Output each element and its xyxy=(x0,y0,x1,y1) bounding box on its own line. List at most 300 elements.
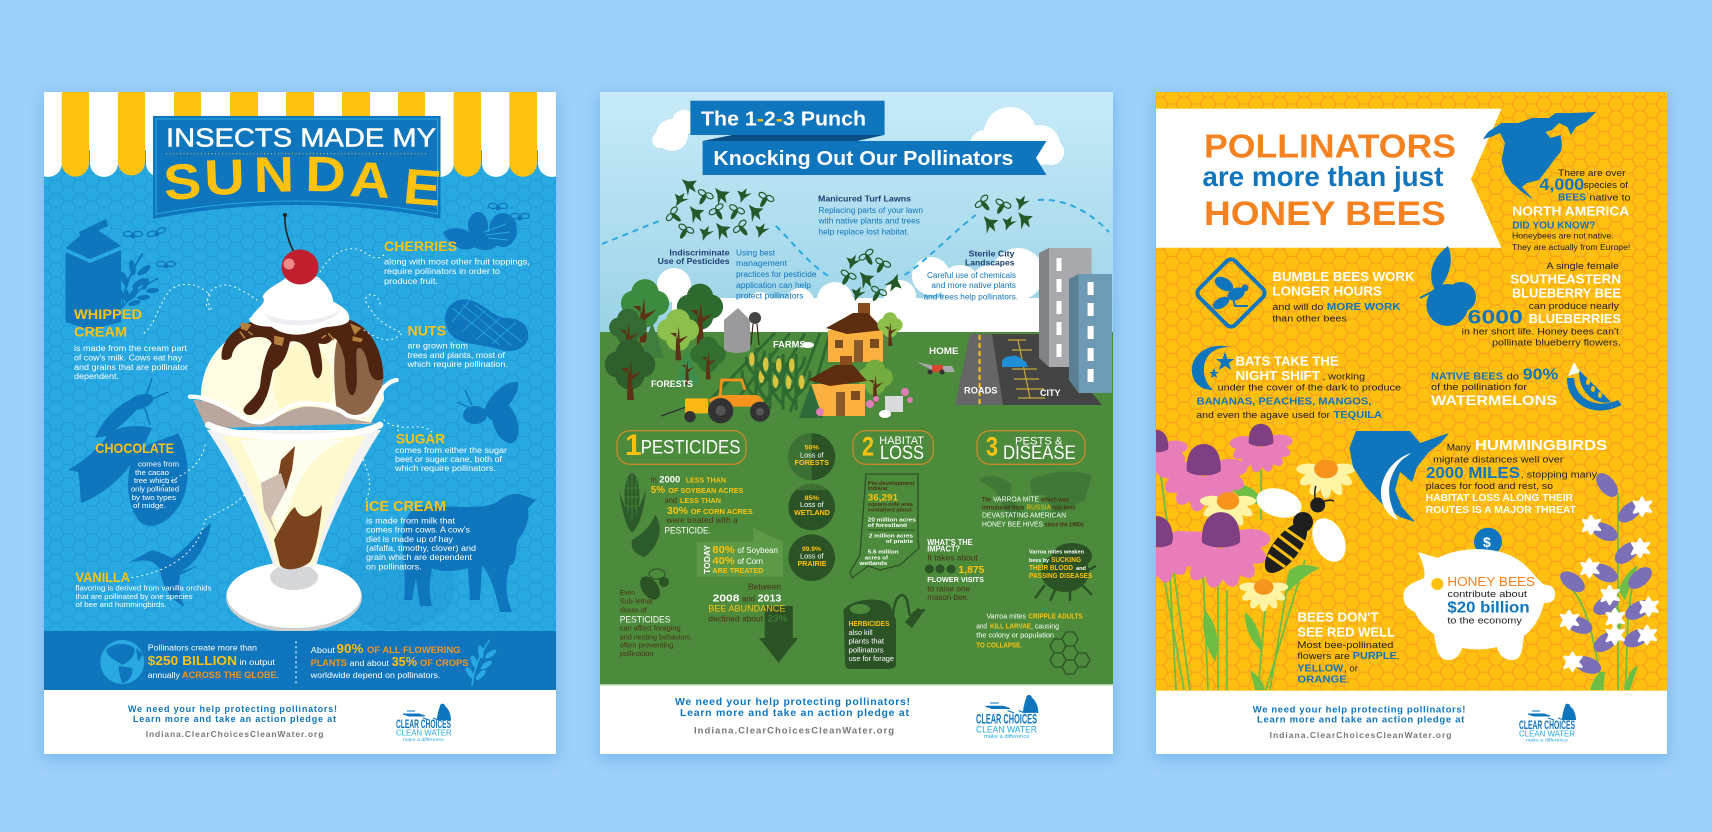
text: chocolate: comes from xyxy=(138,460,179,469)
text: the impact: to raise one xyxy=(927,585,971,594)
icon: piggy bank: contribute about xyxy=(1447,589,1528,599)
text: 90 percent: 35% xyxy=(392,654,417,669)
text: the impact: 1,875 xyxy=(958,564,985,576)
text: ice cream: comes from cows. A cow's xyxy=(366,526,470,535)
text: 90 percent: and about xyxy=(350,659,390,668)
loss circles: PRAIRIE xyxy=(798,559,826,568)
text: 90 percent: worldwide depend on pollinators. xyxy=(310,671,440,680)
text: soybean and corn stats xyxy=(651,475,753,537)
icon: moon and stars xyxy=(1192,346,1234,390)
text: cherries xyxy=(384,239,530,286)
footer: Learn more and take an action pledge at xyxy=(133,714,336,724)
icon: north america xyxy=(1483,112,1596,200)
icon: peanut xyxy=(445,299,528,351)
text: 4000 species xyxy=(1512,168,1631,252)
text: cripple adults: TO COLLAPSE. xyxy=(976,642,1022,649)
scene labels xyxy=(651,340,1061,398)
text: sugar: comes from either the sugar xyxy=(395,446,507,455)
text: whipped cream: dependent. xyxy=(74,372,119,381)
indiana map with habitat stats: acres of xyxy=(865,555,888,561)
text: chocolate xyxy=(95,441,179,510)
sundae xyxy=(190,320,397,632)
icon: cherry xyxy=(282,213,318,284)
text: hummingbirds: 2000 MILES xyxy=(1426,465,1520,482)
text: watermelons: 90% xyxy=(1523,366,1558,383)
text: sub-lethal doses: Even xyxy=(620,588,635,597)
text: soybean and corn stats: 2000 xyxy=(659,475,680,485)
text: soybean and corn stats: PESTICIDE. xyxy=(664,526,711,537)
text: blueberry bee xyxy=(1462,261,1621,348)
text: sterile city: Sterile City xyxy=(969,249,1015,258)
text: vanilla: VANILLA xyxy=(76,570,130,585)
text: vanilla: of bee and hummingbirds. xyxy=(76,600,166,609)
indiana map with habitat stats: 2 million acres xyxy=(869,533,913,539)
text: ice cream: on pollinators. xyxy=(366,563,422,572)
text: watermelons xyxy=(1431,366,1558,408)
text: bees don't see red: . xyxy=(1347,675,1350,685)
text: sucking blood xyxy=(1029,549,1093,580)
indiana map with habitat stats: of prairie xyxy=(886,539,913,545)
text: 90 percent xyxy=(310,641,468,680)
title banners: Knocking Out Our Pollinators xyxy=(713,148,1013,170)
text: nuts: NUTS xyxy=(408,324,446,339)
text: soybean and corn stats: LESS THAN xyxy=(686,476,726,485)
text: ice cream xyxy=(365,499,476,572)
title plate: INSECTS MADE MY xyxy=(166,125,436,153)
text: bats: NIGHT SHIFT xyxy=(1236,368,1320,383)
text: bee abundance: and xyxy=(742,594,755,603)
text: sub-lethal doses: doses of xyxy=(620,605,648,614)
text: sucking blood: THEIR BLOOD xyxy=(1029,565,1073,572)
logo: make a difference xyxy=(984,734,1030,740)
text: vanilla: that are pollinated by one species xyxy=(76,592,193,601)
text: 250 billion: in output xyxy=(239,658,276,667)
text: hummingbirds: HABITAT LOSS ALONG THEIR xyxy=(1426,492,1573,504)
scene labels: HOME xyxy=(929,346,959,356)
text: the impact: IMPACT? xyxy=(927,544,960,553)
text: varroa mite: has been xyxy=(1053,506,1076,512)
stat band xyxy=(44,631,556,690)
text: bees don't see red: YELLOW xyxy=(1297,663,1343,675)
icon: silo and windmill xyxy=(724,308,761,353)
text: bee abundance: declined about xyxy=(708,614,764,623)
text: watermelons: do xyxy=(1507,371,1519,381)
text: bats: and even the agave used for xyxy=(1196,410,1330,420)
text: bees don't see red: SEE RED WELL xyxy=(1297,624,1395,639)
text: sterile city xyxy=(924,249,1018,302)
text: sucking blood: bees by xyxy=(1029,558,1050,564)
text: soybean and corn stats: OF CORN ACRES xyxy=(691,507,753,516)
text: varroa mite: RUSSIA xyxy=(1026,503,1051,512)
text: 250 billion xyxy=(148,644,279,680)
text: whipped cream xyxy=(74,307,188,381)
text: blueberry bee: BLUEBERRIES xyxy=(1529,311,1621,326)
text: sub-lethal doses: pollination xyxy=(620,649,654,658)
text: sub-lethal doses: PESTICIDES xyxy=(620,615,670,626)
text: 4000 species: DID YOU KNOW? xyxy=(1512,220,1596,231)
panel: insects made my sundae xyxy=(34,92,566,754)
icon: varroa mite xyxy=(1035,543,1096,601)
text: 4000 species: They are actually from Europe! xyxy=(1512,242,1630,252)
text: hummingbirds xyxy=(1426,437,1607,516)
text: whipped cream: and grains that are pollinator xyxy=(74,363,188,372)
text: chocolate: by two types xyxy=(132,493,176,502)
text: cherries: along with most other fruit toppings, xyxy=(384,257,530,266)
text: whipped cream: of cow's milk. Cows eat hay xyxy=(74,354,182,363)
text: pesticides: application can help xyxy=(736,281,812,290)
indiana map with habitat stats: 20 million acres xyxy=(868,517,916,523)
icon: small bees by carton xyxy=(124,226,176,268)
scene labels: ROADS xyxy=(964,386,998,396)
text: 250 billion: $250 BILLION xyxy=(148,653,237,668)
text: sterile city: Landscapes xyxy=(965,258,1015,267)
heading: 2 habitat loss: HABITAT xyxy=(879,435,924,447)
text: chocolate: only pollinated xyxy=(131,485,179,494)
heading: 3 pests and disease: DISEASE xyxy=(1003,443,1076,464)
text: sub-lethal doses xyxy=(620,588,692,658)
text: varroa mite: which was xyxy=(1040,498,1070,504)
icon: piggy bank: to the economy xyxy=(1447,615,1522,625)
icon: bee xyxy=(1253,484,1352,580)
icon: honeycomb outline xyxy=(1050,632,1090,674)
loss circles: Loss of xyxy=(800,451,824,460)
text: 4000 species: 4,000 xyxy=(1539,175,1584,194)
logo: CLEAR CHOICES xyxy=(976,711,1037,726)
footer xyxy=(1156,691,1667,754)
text: the impact: WHAT'S THE xyxy=(927,538,973,547)
icon: down arrow xyxy=(759,606,798,663)
text: cripple adults: the colony or population xyxy=(976,631,1054,640)
text: ice cream: ICE CREAM xyxy=(365,499,446,515)
title banner: are more than just xyxy=(1202,161,1443,192)
text: 90 percent: OF ALL FLOWERING xyxy=(367,645,460,655)
herbicide jug: HERBICIDES xyxy=(849,619,890,628)
heading: 1 pesticides xyxy=(617,429,746,464)
title plate xyxy=(153,116,444,219)
loss circles: 99.9% xyxy=(802,546,821,553)
text: vanilla xyxy=(76,570,212,609)
scene: fields xyxy=(705,333,830,412)
indiana map with habitat stats: of forestland xyxy=(868,523,907,529)
text: blueberry bee: BLUEBERRY BEE xyxy=(1512,285,1621,300)
text: blueberry bee: A single female xyxy=(1546,261,1619,271)
title plate: SUNDAE xyxy=(162,147,444,217)
icon: wheat xyxy=(121,253,159,308)
text: nuts xyxy=(406,324,508,369)
text: cripple adults: KILL LARVAE xyxy=(990,623,1031,630)
text: bats xyxy=(1196,354,1401,421)
text: sub-lethal doses: can affect foraging xyxy=(620,624,681,633)
text: watermelons: of the pollination for xyxy=(1431,382,1527,392)
text: bumble bees: BUMBLE BEES WORK xyxy=(1272,269,1415,284)
footer: Indiana.ClearChoicesCleanWater.org xyxy=(694,725,894,736)
text: the impact xyxy=(925,538,985,602)
heading: 3 pests and disease: 3 xyxy=(986,432,998,462)
icon: small tree xyxy=(877,312,903,346)
icon: piggy bank: $20 billion xyxy=(1447,599,1530,616)
icon: bumble bee sign xyxy=(1195,257,1267,329)
loss circles: FORESTS xyxy=(794,458,829,467)
loss circles: 50% xyxy=(804,445,819,452)
icon: bee silhouette xyxy=(456,382,518,443)
logo: make a difference xyxy=(403,737,445,742)
flowers xyxy=(1111,424,1356,690)
text: whipped cream: WHIPPED xyxy=(74,307,142,322)
text: bumble bees: than other bees xyxy=(1272,314,1347,324)
text: sucking blood: SUCKING xyxy=(1051,557,1082,564)
herbicide jug: pollinators xyxy=(849,645,884,654)
text: turf lawns: help replace lost habitat. xyxy=(818,228,909,237)
text: varroa mite xyxy=(982,495,1085,529)
dashed flight path xyxy=(602,200,1109,277)
text: bumble bees: LONGER HOURS xyxy=(1272,283,1382,298)
icon: house one xyxy=(826,303,884,362)
logo: CLEAN WATER xyxy=(396,729,452,738)
icon: buildings xyxy=(1039,248,1112,393)
text: varroa mite: VARROA MITE xyxy=(993,495,1039,504)
icon: midge xyxy=(95,378,168,438)
text: bumble bees: and will do xyxy=(1272,302,1323,312)
herbicide jug xyxy=(844,595,925,669)
text: watermelons: WATERMELONS xyxy=(1431,392,1557,408)
text: pesticides: Using best xyxy=(736,249,776,258)
text: blueberry bee: SOUTHEASTERN xyxy=(1510,271,1621,286)
text: pesticides: management xyxy=(736,259,788,268)
text: turf lawns: with native plants and trees xyxy=(817,217,920,226)
icon: insect swarms xyxy=(664,172,1037,305)
text: the impact: FLOWER VISITS xyxy=(927,575,984,584)
text: bats: BATS TAKE THE xyxy=(1236,354,1339,369)
footer: We need your help protecting pollinators! xyxy=(675,696,910,708)
loss circles: 85% xyxy=(804,495,819,502)
indiana map with habitat stats: square-mile area xyxy=(868,502,913,508)
heading: 1 pesticides: PESTICIDES xyxy=(641,437,740,458)
text: bumble bees: MORE WORK xyxy=(1327,301,1401,313)
loss circles: Loss of xyxy=(800,500,824,509)
text: bees don't see red: , xyxy=(1397,651,1399,661)
today arrow callout: of Soybean xyxy=(737,546,778,555)
text: the impact: mason bee. xyxy=(927,593,969,602)
text: 90 percent: PLANTS xyxy=(311,658,347,668)
text: chocolate: the cacao xyxy=(135,468,169,477)
awning xyxy=(34,92,566,177)
text: cripple adults: CRIPPLE ADULTS xyxy=(1028,613,1083,620)
herbicide jug: use for forage xyxy=(849,654,894,663)
text: bees don't see red: PURPLE xyxy=(1353,650,1397,662)
indiana map with habitat stats xyxy=(850,474,919,578)
text: bees don't see red: flowers are xyxy=(1297,651,1350,661)
forest xyxy=(605,279,726,400)
icon: wheat xyxy=(464,640,498,686)
icon: piggy bank: HONEY BEES xyxy=(1447,575,1535,589)
icon: globe xyxy=(100,640,144,684)
text: 90 percent: OF CROPS xyxy=(420,658,468,668)
text: 4000 species: There are over xyxy=(1558,168,1626,178)
text: hummingbirds: ROUTES IS A MAJOR THREAT xyxy=(1426,504,1577,516)
footer xyxy=(128,704,452,741)
text: whipped cream: is made from the cream part xyxy=(74,344,188,353)
icon: cherry blossom xyxy=(443,203,530,250)
indiana map with habitat stats: wetlands xyxy=(858,561,887,567)
text: bees don't see red: ORANGE xyxy=(1297,674,1347,686)
text: ice cream: is made from milk that xyxy=(366,517,456,526)
icon: piggy bank: $ xyxy=(1483,534,1491,550)
clouds xyxy=(652,107,1072,332)
title banner xyxy=(1156,109,1502,248)
text: bees don't see red: BEES DON'T xyxy=(1297,610,1379,625)
heading: 2 habitat loss: LOSS xyxy=(880,443,924,464)
text: whipped cream: CREAM xyxy=(74,325,127,340)
footer: We need your help protecting pollinators! xyxy=(1253,705,1465,716)
text: soybean and corn stats: 5% xyxy=(651,484,666,496)
text: watermelons: NATIVE BEES xyxy=(1431,370,1503,382)
herbicide jug: also kill xyxy=(849,628,873,637)
heading: 3 pests and disease: PESTS & xyxy=(1015,435,1063,447)
text: blueberry bee: can produce nearly xyxy=(1529,301,1620,311)
text: varroa mite: The xyxy=(982,498,992,504)
text: varroa mite: HONEY BEE HIVES xyxy=(982,520,1043,529)
icon: piggy bank xyxy=(1403,528,1555,660)
text: pesticides: Indiscriminate xyxy=(669,249,730,258)
icon: house two xyxy=(799,356,893,418)
indiana map with habitat stats: 5.6 million xyxy=(868,550,899,556)
text: varroa mite: since the 1980s xyxy=(1045,523,1085,529)
icon: tractor xyxy=(661,380,770,423)
text: bats: TEQUILA xyxy=(1334,409,1382,421)
text: bees don't see red: Most bee-pollinated xyxy=(1297,640,1393,650)
text: chocolate: tree which is xyxy=(134,476,177,485)
text: chocolate: of midge. xyxy=(133,501,166,510)
icon: bee xyxy=(636,569,669,603)
text: sucking blood: and xyxy=(1076,566,1086,572)
icon: whipped cream xyxy=(249,277,349,335)
dotted flight paths xyxy=(130,249,432,578)
heading: 2 habitat loss: 2 xyxy=(862,432,874,462)
text: bee abundance: 2008 xyxy=(713,592,740,604)
text: bee abundance: BEE ABUNDANCE xyxy=(708,604,785,614)
today arrow callout: TODAY xyxy=(703,544,712,574)
scene labels: FORESTS xyxy=(651,379,693,389)
text: varroa mite: introduced from xyxy=(982,506,1024,512)
text: 4000 species: Honeybees are not native. xyxy=(1512,231,1614,241)
panel: pollinators are more than just honey bees xyxy=(1111,92,1667,754)
icon: watermelon slice xyxy=(1567,362,1622,410)
text: bats: BANANAS, PEACHES, MANGOS, xyxy=(1197,396,1371,408)
text: blueberry bee: pollinate blueberry flowers. xyxy=(1492,338,1621,348)
text: varroa mite: DEVASTATING AMERICAN xyxy=(982,511,1066,520)
indiana map with habitat stats: Pre-development xyxy=(868,481,915,487)
today arrow callout: 80% xyxy=(712,545,735,556)
text: turf lawns: Manicured Turf Lawns xyxy=(818,195,912,204)
text: sterile city: Careful use of chemicals xyxy=(927,271,1016,280)
text: pesticides: protect pollinators xyxy=(736,292,804,301)
text: cherries: produce fruit. xyxy=(384,277,438,286)
text: 4000 species: species of xyxy=(1584,180,1629,190)
text: bee abundance xyxy=(708,582,787,623)
heading: 1 pesticides: 1 xyxy=(625,429,642,462)
text: sub-lethal doses: often preventing xyxy=(620,640,674,649)
indiana map with habitat stats: 36,291 xyxy=(868,492,899,503)
logo xyxy=(396,704,452,742)
today arrow callout: of Corn xyxy=(737,557,763,566)
indiana map with habitat stats: contained about xyxy=(868,508,912,514)
text: cherries: CHERRIES xyxy=(384,239,457,254)
text: ice cream: diet is made up of hay xyxy=(366,535,453,544)
text: cripple adults xyxy=(976,611,1083,649)
text: sterile city: and trees help pollinators. xyxy=(924,293,1018,302)
text: bee abundance: 23% xyxy=(768,613,787,623)
loss circles: WETLAND xyxy=(794,508,831,517)
logo: CLEAN WATER xyxy=(1519,730,1575,739)
text: nuts: which require pollination. xyxy=(406,360,508,369)
text: sucking blood: PASSING DISEASES xyxy=(1029,573,1093,580)
text: nuts: trees and plants, most of xyxy=(408,351,506,360)
text: 250 billion: ACROSS THE GLOBE xyxy=(182,670,277,680)
title banners xyxy=(690,101,1046,175)
footer: We need your help protecting pollinators! xyxy=(128,704,337,714)
icon: corn rows xyxy=(742,348,810,410)
shadow under sundae xyxy=(342,542,453,628)
icon: garden flowers and hive xyxy=(802,342,913,418)
text: sterile city: and more native plants xyxy=(931,281,1016,290)
text: 250 billion: . xyxy=(277,671,279,680)
text: bee abundance: 2013 xyxy=(758,592,781,604)
text: turf lawns xyxy=(817,195,923,237)
text: ice cream: grain which are dependent xyxy=(366,553,473,562)
scene labels: CITY xyxy=(1040,388,1061,398)
icon: car xyxy=(1002,356,1028,367)
icon: map with migration arrow xyxy=(1349,431,1449,522)
text: 90 percent: 90% xyxy=(336,641,364,656)
text: pesticides xyxy=(658,249,817,301)
panel: the 1-2-3 punch xyxy=(600,92,1113,754)
logo: CLEAR CHOICES xyxy=(1519,718,1575,732)
icon: cacao leaf and pod xyxy=(68,426,188,526)
text: soybean and corn stats: were treated with a xyxy=(665,516,738,525)
text: cripple adults: , causing xyxy=(1031,621,1059,630)
heading: 3 pests and disease xyxy=(977,431,1085,464)
text: sub-lethal doses: Sub-lethal xyxy=(620,597,653,606)
loss circles xyxy=(788,433,835,581)
today arrow callout xyxy=(696,528,783,577)
text: sucking blood: Varroa mites weaken xyxy=(1029,549,1085,555)
icon: world map xyxy=(979,472,1092,525)
text: cripple adults: Varroa mites xyxy=(986,611,1026,620)
icon: lawn mower xyxy=(917,362,955,374)
text: soybean and corn stats: and xyxy=(665,496,677,505)
footer xyxy=(600,684,1113,754)
logo: make a difference xyxy=(1526,738,1569,743)
text: vanilla: flavoring is derived from vanilla orchids xyxy=(76,584,212,593)
text: hummingbirds: HUMMINGBIRDS xyxy=(1475,437,1607,454)
text: the impact: It takes about xyxy=(927,554,979,563)
today arrow callout: 40% xyxy=(712,556,735,567)
text: cherries: require pollinators in order to xyxy=(384,267,501,276)
logo: CLEAR CHOICES xyxy=(396,717,451,731)
logo xyxy=(1519,704,1576,743)
text: hummingbirds: , stopping many xyxy=(1521,470,1598,480)
footer: Learn more and take an action pledge at xyxy=(680,707,910,719)
scene labels: FARMS xyxy=(773,340,806,350)
herbicide jug: plants that xyxy=(849,637,885,646)
title banner: POLLINATORS xyxy=(1204,127,1456,164)
text: turf lawns: Replacing parts of your lawn xyxy=(818,206,923,215)
today arrow callout: ARE TREATED xyxy=(712,566,764,575)
icon: hummingbird xyxy=(128,523,211,607)
text: sugar: SUGAR xyxy=(396,431,445,446)
logo: CLEAN WATER xyxy=(976,724,1037,734)
footer: Indiana.ClearChoicesCleanWater.org xyxy=(1270,730,1452,740)
